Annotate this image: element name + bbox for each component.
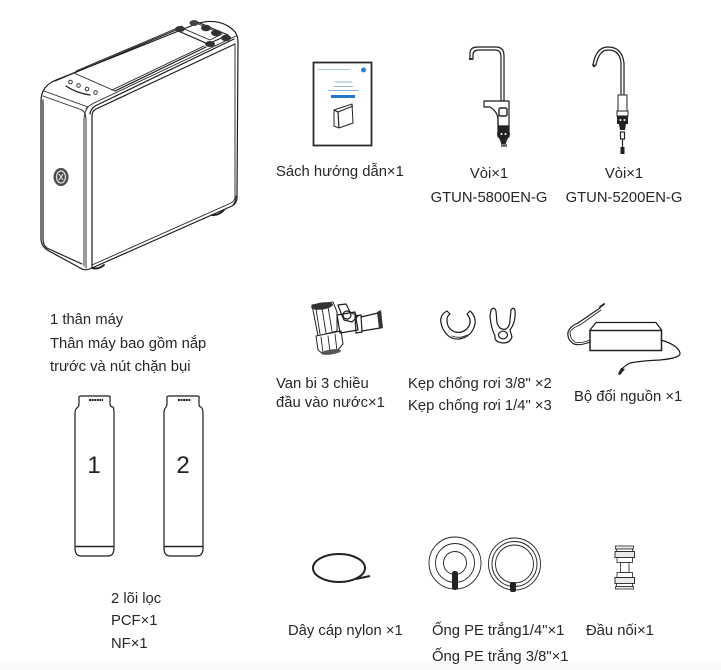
icon: filter cartridge 1 [75,396,114,556]
bottom band [0,662,721,670]
icon: nylon cable [313,554,365,582]
label: ball valve: đầu vào nước×1 [276,395,385,411]
icon: main water purifier unit [41,20,238,270]
label: connector: Đầu nối×1 [586,623,654,639]
label: main unit: trước và nút chặn bụi [50,359,191,375]
label: ball valve: Van bi 3 chiều [276,376,369,392]
label: filters: NF×1 [111,636,148,652]
label: PE tubes: Ống PE trắng 3/8"×1 [432,647,568,665]
label: main unit: Thân máy bao gồm nắp [50,335,206,352]
icon: nylon cable tail [356,576,370,579]
label: main unit: 1 thân máy [50,312,124,328]
label: clips: Kẹp chống rơi 3/8" ×2 [408,376,552,392]
label: adapter: Bộ đổi nguồn ×1 [574,389,682,405]
clip 1/4 [490,308,515,343]
label: faucet 5800: Vòi×1 [470,166,508,182]
icon: faucet GTUN-5800EN-G [469,47,510,147]
label: filters: PCF×1 [111,613,157,629]
label: PE tubes [432,621,568,665]
icon: faucet GTUN-5200EN-G [592,47,628,154]
label: PE tubes: Ống PE trắng1/4"×1 [432,621,564,639]
label: clips [408,376,552,414]
icon: PE tube 3/8 coil [488,538,540,592]
GE logo [54,168,68,186]
icon: power adapter [568,304,680,375]
filter number: 1 [87,452,101,479]
label: nylon cable: Dây cáp nylon ×1 [288,623,403,639]
label: ball valve [276,376,385,411]
icon: PE tube 1/4 coil [429,537,481,590]
clip 3/8 [441,311,475,339]
label: faucet 5200 [566,166,682,206]
label: main unit [50,312,206,375]
label: faucet 5800 [431,166,547,206]
label: manual: Sách hướng dẫn×1 [276,163,404,180]
label: faucet 5800: GTUN-5800EN-G [431,190,547,206]
icon: anti-drop clips [441,308,515,343]
icon: filter cartridge 2 [164,396,203,556]
filter number: 2 [176,452,190,479]
top surface seams [55,30,176,81]
icon: instruction manual [314,62,372,146]
label: faucet 5200: GTUN-5200EN-G [566,190,682,206]
rear connection panel [175,20,231,47]
label: filters [111,591,162,652]
label: clips: Kẹp chống rơi 1/4" ×3 [408,398,552,414]
feet [92,265,104,269]
icon: connector [615,546,634,589]
control panel on top [66,80,97,95]
label: faucet 5200: Vòi×1 [605,166,643,182]
label: filters: 2 lõi lọc [111,591,162,607]
icon: 3-way ball valve [311,301,383,356]
